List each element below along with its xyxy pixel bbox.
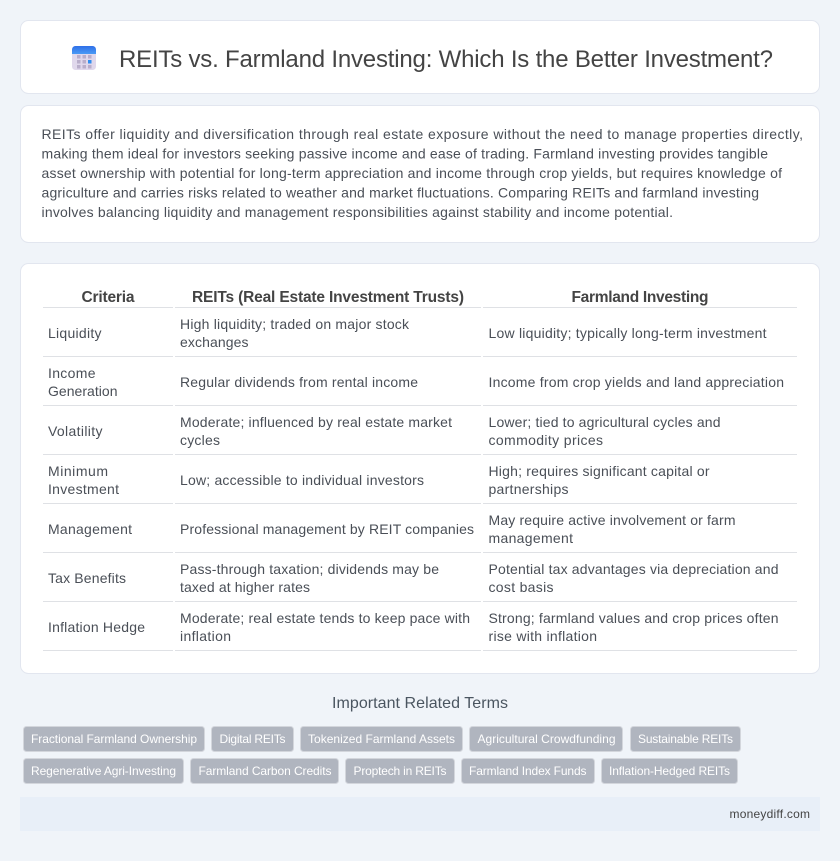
row: inflation hedge: Strong; farmland values and crop prices often xyxy=(488,610,778,626)
table header row: REITs (Real Estate Investment Trusts) xyxy=(192,289,464,306)
row: volatility: Volatility xyxy=(48,423,102,439)
row: inflation hedge: rise with inflation xyxy=(488,628,597,644)
row: income generation: Income from crop yields and land appreciation xyxy=(488,374,784,390)
row: minimum investment: Minimum xyxy=(48,463,108,479)
row: inflation hedge: Inflation Hedge xyxy=(48,619,145,635)
related terms tags: Sustainable REITs xyxy=(638,732,733,746)
row: minimum investment xyxy=(43,463,797,504)
row: income generation xyxy=(43,365,797,406)
table header row: Criteria xyxy=(82,289,135,306)
row: minimum investment: High; requires significant capital or xyxy=(488,463,710,479)
related terms tags xyxy=(24,726,740,784)
row: volatility: commodity prices xyxy=(488,432,603,448)
row: liquidity xyxy=(43,316,797,357)
row: liquidity: Liquidity xyxy=(48,325,102,341)
row: liquidity: High liquidity; traded on major stock xyxy=(180,316,410,332)
row: management: May require active involvement or farm xyxy=(488,512,736,528)
row: income generation: Regular dividends from rental income xyxy=(180,374,418,390)
row: management: Professional management by REIT companies xyxy=(180,521,474,537)
row: volatility xyxy=(43,414,797,455)
related terms tags: Digital REITs xyxy=(220,732,286,746)
row: income generation: Income xyxy=(48,365,96,381)
related terms tags: Tokenized Farmland Assets xyxy=(308,732,455,746)
row: tax benefits xyxy=(43,561,797,602)
row: inflation hedge: inflation xyxy=(180,628,231,644)
panel: introduction xyxy=(20,106,820,242)
row: volatility: cycles xyxy=(180,432,220,448)
row: management: Management xyxy=(48,521,132,537)
title: REITs vs. Farmland Investing: Which Is the Better Investment? xyxy=(119,46,773,73)
related terms tags: Farmland Index Funds xyxy=(469,764,586,778)
intro text block xyxy=(42,126,803,220)
related terms tags: Fractional Farmland Ownership xyxy=(31,732,197,746)
row: minimum investment: Low; accessible to individual investors xyxy=(180,472,424,488)
intro text block: agriculture and carries risks related to weather and market fluctuations. Comparing REITs and farmland investing xyxy=(42,184,759,200)
related terms tags: Inflation-Hedged REITs xyxy=(609,764,730,778)
intro text block: asset ownership with potential for long-term appreciation and income through crop yields, but requires knowledge of xyxy=(42,165,782,181)
row: volatility: Moderate; influenced by real estate market xyxy=(180,414,452,430)
icon: calendar xyxy=(72,46,96,70)
panel: comparison table xyxy=(20,264,820,674)
row: inflation hedge: Moderate; real estate tends to keep pace with xyxy=(180,610,470,626)
header panel xyxy=(20,20,820,94)
row: income generation: Generation xyxy=(48,383,118,399)
row: tax benefits: cost basis xyxy=(488,579,554,595)
intro text block: REITs offer liquidity and diversification through real estate exposure without the need to manage properties directly, xyxy=(42,126,803,142)
intro text block: involves balancing liquidity and management responsibilities against stability and income potential. xyxy=(42,204,673,220)
related terms tags: Regenerative Agri-Investing xyxy=(31,764,176,778)
intro text block: making them ideal for investors seeking passive income and ease of trading. Farmland investing provides tangible xyxy=(42,146,768,162)
footer source text: moneydiff.com xyxy=(730,807,810,821)
row: liquidity: Low liquidity; typically long-term investment xyxy=(488,325,767,341)
related terms tags: Farmland Carbon Credits xyxy=(198,764,332,778)
row: tax benefits: taxed at higher rates xyxy=(180,579,310,595)
row: volatility: Lower; tied to agricultural cycles and xyxy=(488,414,720,430)
related terms tags: Proptech in REITs xyxy=(354,764,446,778)
related terms tags: Agricultural Crowdfunding xyxy=(478,732,616,746)
table header row: Farmland Investing xyxy=(572,289,708,306)
footer bar xyxy=(20,797,820,831)
row: tax benefits: Potential tax advantages via depreciation and xyxy=(488,561,778,577)
row: management xyxy=(43,512,797,553)
row: inflation hedge xyxy=(43,610,797,651)
table header row xyxy=(43,289,797,308)
row: management: management xyxy=(488,530,573,546)
row: liquidity: exchanges xyxy=(180,334,248,350)
row: tax benefits: Pass-through taxation; dividends may be xyxy=(180,561,439,577)
row: minimum investment: partnerships xyxy=(488,481,568,497)
heading: important related terms: Important Related Terms xyxy=(332,695,508,712)
row: tax benefits: Tax Benefits xyxy=(48,570,126,586)
row: minimum investment: Investment xyxy=(48,481,119,497)
